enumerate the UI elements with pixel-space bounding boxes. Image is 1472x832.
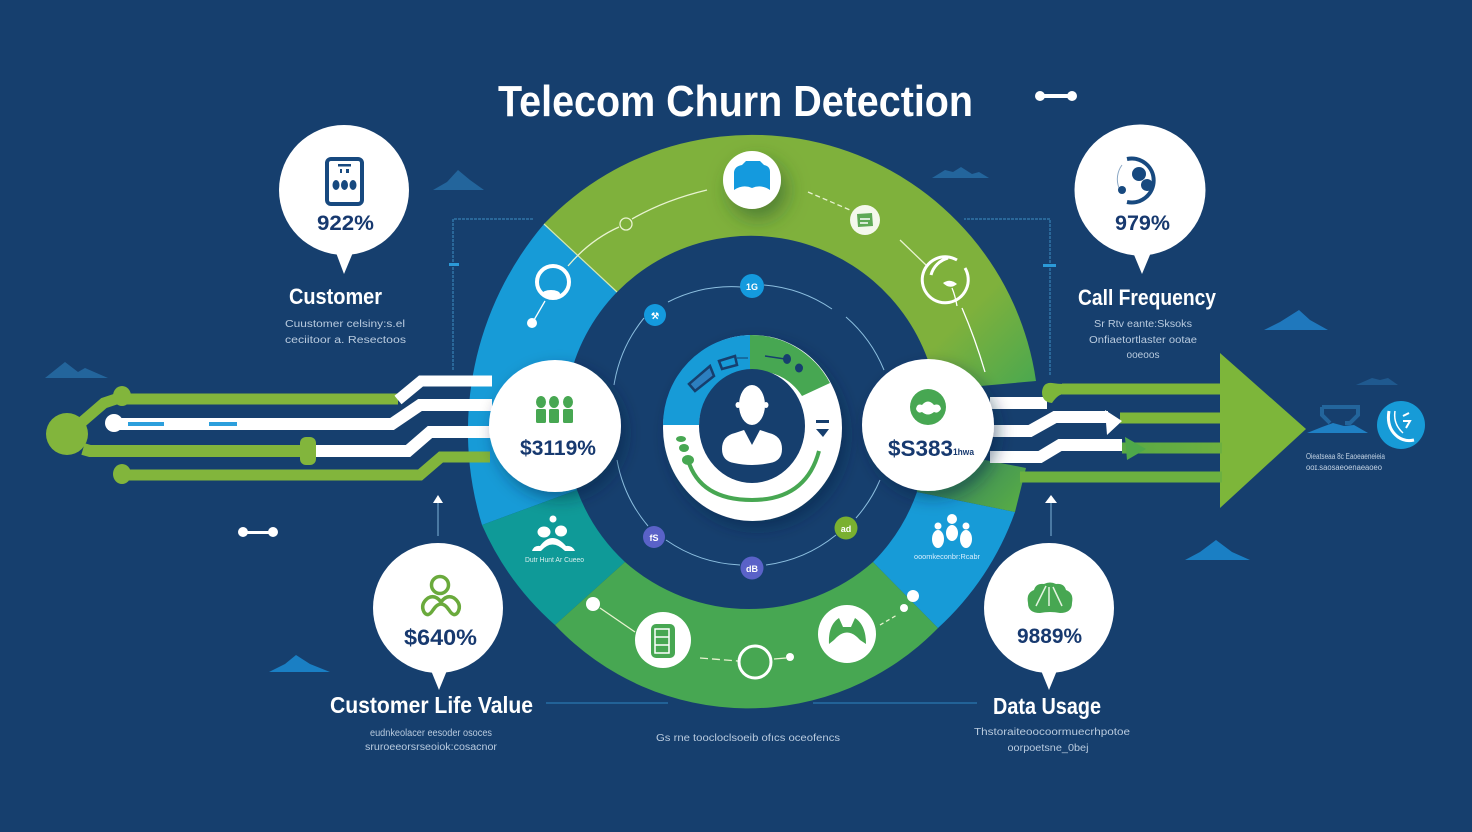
node: lower right: ad — [841, 524, 851, 534]
metric value: $3119% — [520, 437, 596, 460]
orbit nodes — [643, 274, 858, 580]
ring segment: right blue — [873, 492, 1015, 628]
title: Telecom Churn Detection — [498, 77, 973, 126]
icon: hollow node — [620, 218, 632, 230]
left data pipelines — [46, 381, 492, 484]
node: upper left: ⚒ — [651, 311, 659, 321]
callout: customer life value — [373, 543, 503, 690]
icon: mound and tray — [1307, 407, 1368, 433]
dial blue quadrant — [663, 335, 750, 425]
up arrow right — [1045, 495, 1057, 536]
dashed brackets — [449, 219, 1056, 703]
pipe 2 — [108, 405, 492, 424]
pipe blue dashes — [128, 422, 237, 426]
up arrow left — [433, 495, 443, 536]
icon: connector near title — [1035, 91, 1077, 101]
node: upper left — [644, 304, 666, 326]
icon: teal segment people — [532, 516, 575, 551]
node: bottom — [740, 556, 764, 580]
central customer dial — [663, 335, 842, 521]
footnote: Gs rne toocloclsoeib ofıcs oceofencs — [656, 733, 840, 744]
description: call frequency: ooeoos — [1126, 350, 1160, 361]
value: 979% — [1115, 212, 1170, 235]
dial green quadrant — [750, 335, 830, 396]
pipe 3 — [83, 449, 308, 451]
icon: green cloud — [910, 389, 946, 425]
dial glasses marks — [689, 356, 748, 391]
heading: customer life value: Customer Life Value — [330, 692, 533, 718]
description: right outcome: Oieatseaa 8c Eaoeaeneieia — [1306, 452, 1385, 461]
white pipes — [990, 403, 1122, 457]
ring segment: top green — [544, 135, 1036, 390]
description: customer life value — [365, 728, 498, 753]
heading: data usage: Data Usage — [993, 693, 1101, 719]
orbit ring — [614, 285, 884, 565]
value: 922% — [317, 212, 374, 235]
arrow tips — [1105, 410, 1122, 435]
node: lower left — [643, 526, 665, 548]
right output arrow — [990, 353, 1306, 508]
description: customer life value: eudnkeolacer eesoder osoces — [370, 728, 492, 739]
description: call frequency — [1089, 319, 1197, 361]
green node — [1042, 383, 1064, 403]
pipe 4 — [122, 457, 490, 475]
dial inner disc — [699, 369, 805, 483]
ring connector lines — [534, 190, 985, 661]
dial right marks — [816, 420, 829, 437]
right blue caption: ooomkeconbr:Rcabr — [914, 552, 980, 561]
ring segment: left blue — [468, 224, 617, 525]
icon: bottom ring nodes — [586, 590, 919, 678]
callout: data usage — [984, 543, 1114, 690]
icon: small green badge — [850, 205, 880, 235]
description: customer: Cuustomer celsiny:s.el — [285, 319, 405, 330]
decorative mountains — [45, 167, 1398, 672]
teal segment caption: Dutr Hunt Ar Cueeo — [525, 555, 584, 564]
icon: connector lower left — [238, 527, 278, 537]
description: call frequency: Onfiaetortlaster ootae — [1089, 335, 1197, 346]
ring segment: bottom green — [555, 562, 938, 708]
pipe nodes — [46, 386, 316, 484]
arrow head — [1220, 353, 1306, 508]
middle right metric circle — [862, 359, 994, 491]
icon: three people — [536, 396, 573, 423]
node: top — [740, 274, 764, 298]
icon: phone badge — [1377, 401, 1425, 449]
heading: call frequency: Call Frequency — [1078, 285, 1217, 310]
icon: person outline — [423, 576, 459, 615]
icon: left ring — [527, 266, 569, 328]
icon: top badge — [723, 151, 781, 209]
pipe 1 — [75, 397, 398, 428]
main ring — [468, 135, 1036, 708]
pipe white node — [105, 414, 123, 432]
value: $640% — [404, 625, 477, 650]
callout: call frequency — [1074, 124, 1206, 274]
description: call frequency: Sr Rtv eante:Sksoks — [1094, 319, 1192, 330]
description: data usage: Thstoraiteoocoormuecrhpotoe — [974, 727, 1130, 738]
icon: green cloud — [1028, 582, 1072, 613]
node: lower right — [834, 516, 858, 540]
dial green arc — [676, 436, 819, 500]
icon: call headset — [1117, 158, 1154, 203]
callout: customer — [279, 125, 409, 274]
person icon — [722, 385, 782, 465]
metric suffix: 1hwa — [953, 447, 975, 457]
node: top: 1G — [746, 282, 758, 292]
description: data usage — [974, 727, 1130, 754]
description: right outcome — [1306, 452, 1385, 472]
node: bottom: dB — [746, 564, 758, 574]
dial green marks — [765, 354, 803, 372]
ring segment: small right green — [915, 460, 1026, 512]
icon: right blue people — [932, 514, 972, 548]
segment divider — [544, 224, 617, 292]
description: right outcome: ooɪ.saosaeoenaeaoeo — [1306, 463, 1383, 472]
metric value: $S383 — [888, 436, 953, 461]
value: 9889% — [1017, 625, 1082, 648]
description: data usage: oorpoetsne_0bej — [1008, 743, 1088, 754]
heading: customer: Customer — [289, 284, 382, 309]
ring segment: teal — [482, 490, 625, 625]
icon: sprout ring — [922, 257, 968, 306]
green bars — [1020, 389, 1222, 477]
description: customer life value: sruroeeorsrseoiok:cosacnor — [365, 742, 498, 753]
icon: bottom face badge — [818, 605, 876, 663]
description: customer — [285, 319, 406, 346]
description: customer: ceciitoor a. Resectoos — [285, 335, 406, 346]
icon: bottom phone badge — [635, 612, 691, 668]
icon: device — [327, 159, 362, 204]
node: lower left: fS — [650, 533, 658, 543]
middle left metric circle — [489, 360, 621, 492]
